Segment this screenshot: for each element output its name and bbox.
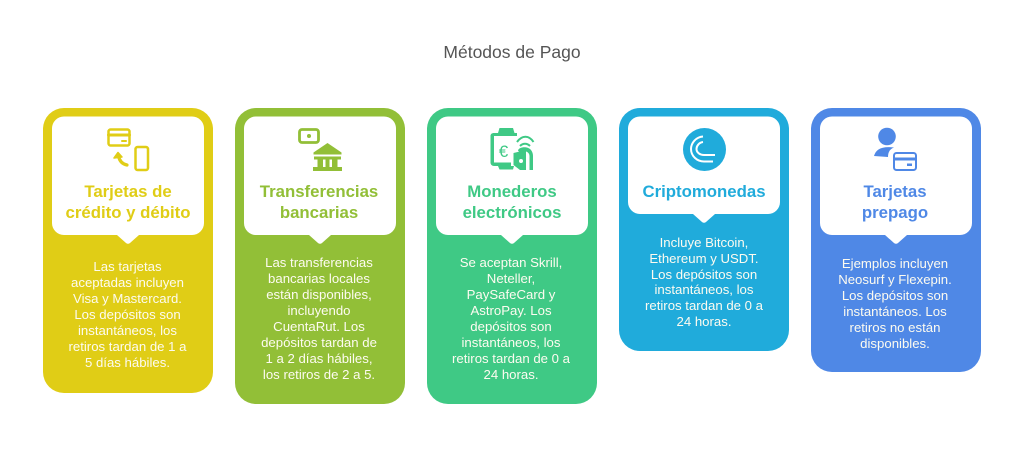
text block: los retiros de 2 a 5.: [263, 367, 375, 382]
text block: Los depósitos son: [74, 307, 181, 322]
icon: bank: [300, 130, 342, 171]
heading: bancarias: [280, 203, 358, 222]
text block: 24 horas.: [676, 314, 732, 329]
text block: Neosurf y Flexepin.: [838, 272, 952, 287]
panel: transferencias bancarias: [235, 108, 405, 404]
text block: disponibles.: [860, 336, 930, 351]
text block: 5 días hábiles.: [85, 355, 170, 370]
icon: smartwatch wallet: [490, 128, 534, 170]
panel: tarjetas de crédito y débito: [43, 108, 213, 393]
text block: están disponibles,: [266, 287, 372, 302]
text block: retiros tardan de 0 a: [452, 351, 571, 366]
text block: Se aceptan Skrill,: [460, 255, 562, 270]
text block: aceptadas incluyen: [71, 275, 184, 290]
text block: Visa y Mastercard.: [73, 291, 182, 306]
panel: criptomonedas: [619, 108, 789, 351]
icon: person with card: [874, 128, 916, 170]
text block: instantáneos, los: [462, 335, 561, 350]
panel: monederos electrónicos: [427, 108, 597, 404]
heading: prepago: [862, 203, 928, 222]
text block: depósitos tardan de: [261, 335, 377, 350]
heading: Monederos: [467, 182, 557, 201]
text block: PaySafeCard y: [467, 287, 556, 302]
text block: depósitos son: [470, 319, 552, 334]
text block: AstroPay. Los: [470, 303, 552, 318]
text block: Neteller,: [487, 271, 535, 286]
text block: instantáneos, los: [78, 323, 177, 338]
text block: Incluye Bitcoin,: [660, 235, 748, 250]
title: Métodos de Pago: [443, 42, 581, 62]
icon: card and phone: [108, 130, 148, 170]
text block: Los depósitos son: [651, 267, 757, 282]
heading: Criptomonedas: [642, 182, 766, 201]
text block: 24 horas.: [484, 367, 538, 382]
text block: 1 a 2 días hábiles,: [265, 351, 373, 366]
heading: Tarjetas: [863, 182, 927, 201]
text block: instantáneos, los: [655, 282, 754, 297]
heading: electrónicos: [463, 203, 561, 222]
text block: retiros tardan de 0 a: [645, 298, 764, 313]
icon: crypto coin: [683, 128, 726, 171]
text block: retiros no están: [850, 320, 940, 335]
text block: instantáneos. Los: [843, 304, 947, 319]
text block: bancarias locales: [268, 271, 370, 286]
text block: retiros tardan de 1 a: [68, 339, 187, 354]
text block: Las tarjetas: [93, 259, 162, 274]
text block: Ejemplos incluyen: [842, 256, 948, 271]
text block: CuentaRut. Los: [273, 319, 365, 334]
text block: Los depósitos son: [842, 288, 948, 303]
heading: crédito y débito: [66, 203, 190, 222]
icon: smartwatch wallet: €: [499, 142, 509, 161]
heading: Tarjetas de: [84, 182, 172, 201]
heading: Transferencias: [260, 182, 378, 201]
text block: Ethereum y USDT.: [649, 251, 759, 266]
text block: incluyendo: [287, 303, 351, 318]
panel: tarjetas prepago: [811, 108, 981, 372]
text block: Las transferencias: [265, 255, 373, 270]
